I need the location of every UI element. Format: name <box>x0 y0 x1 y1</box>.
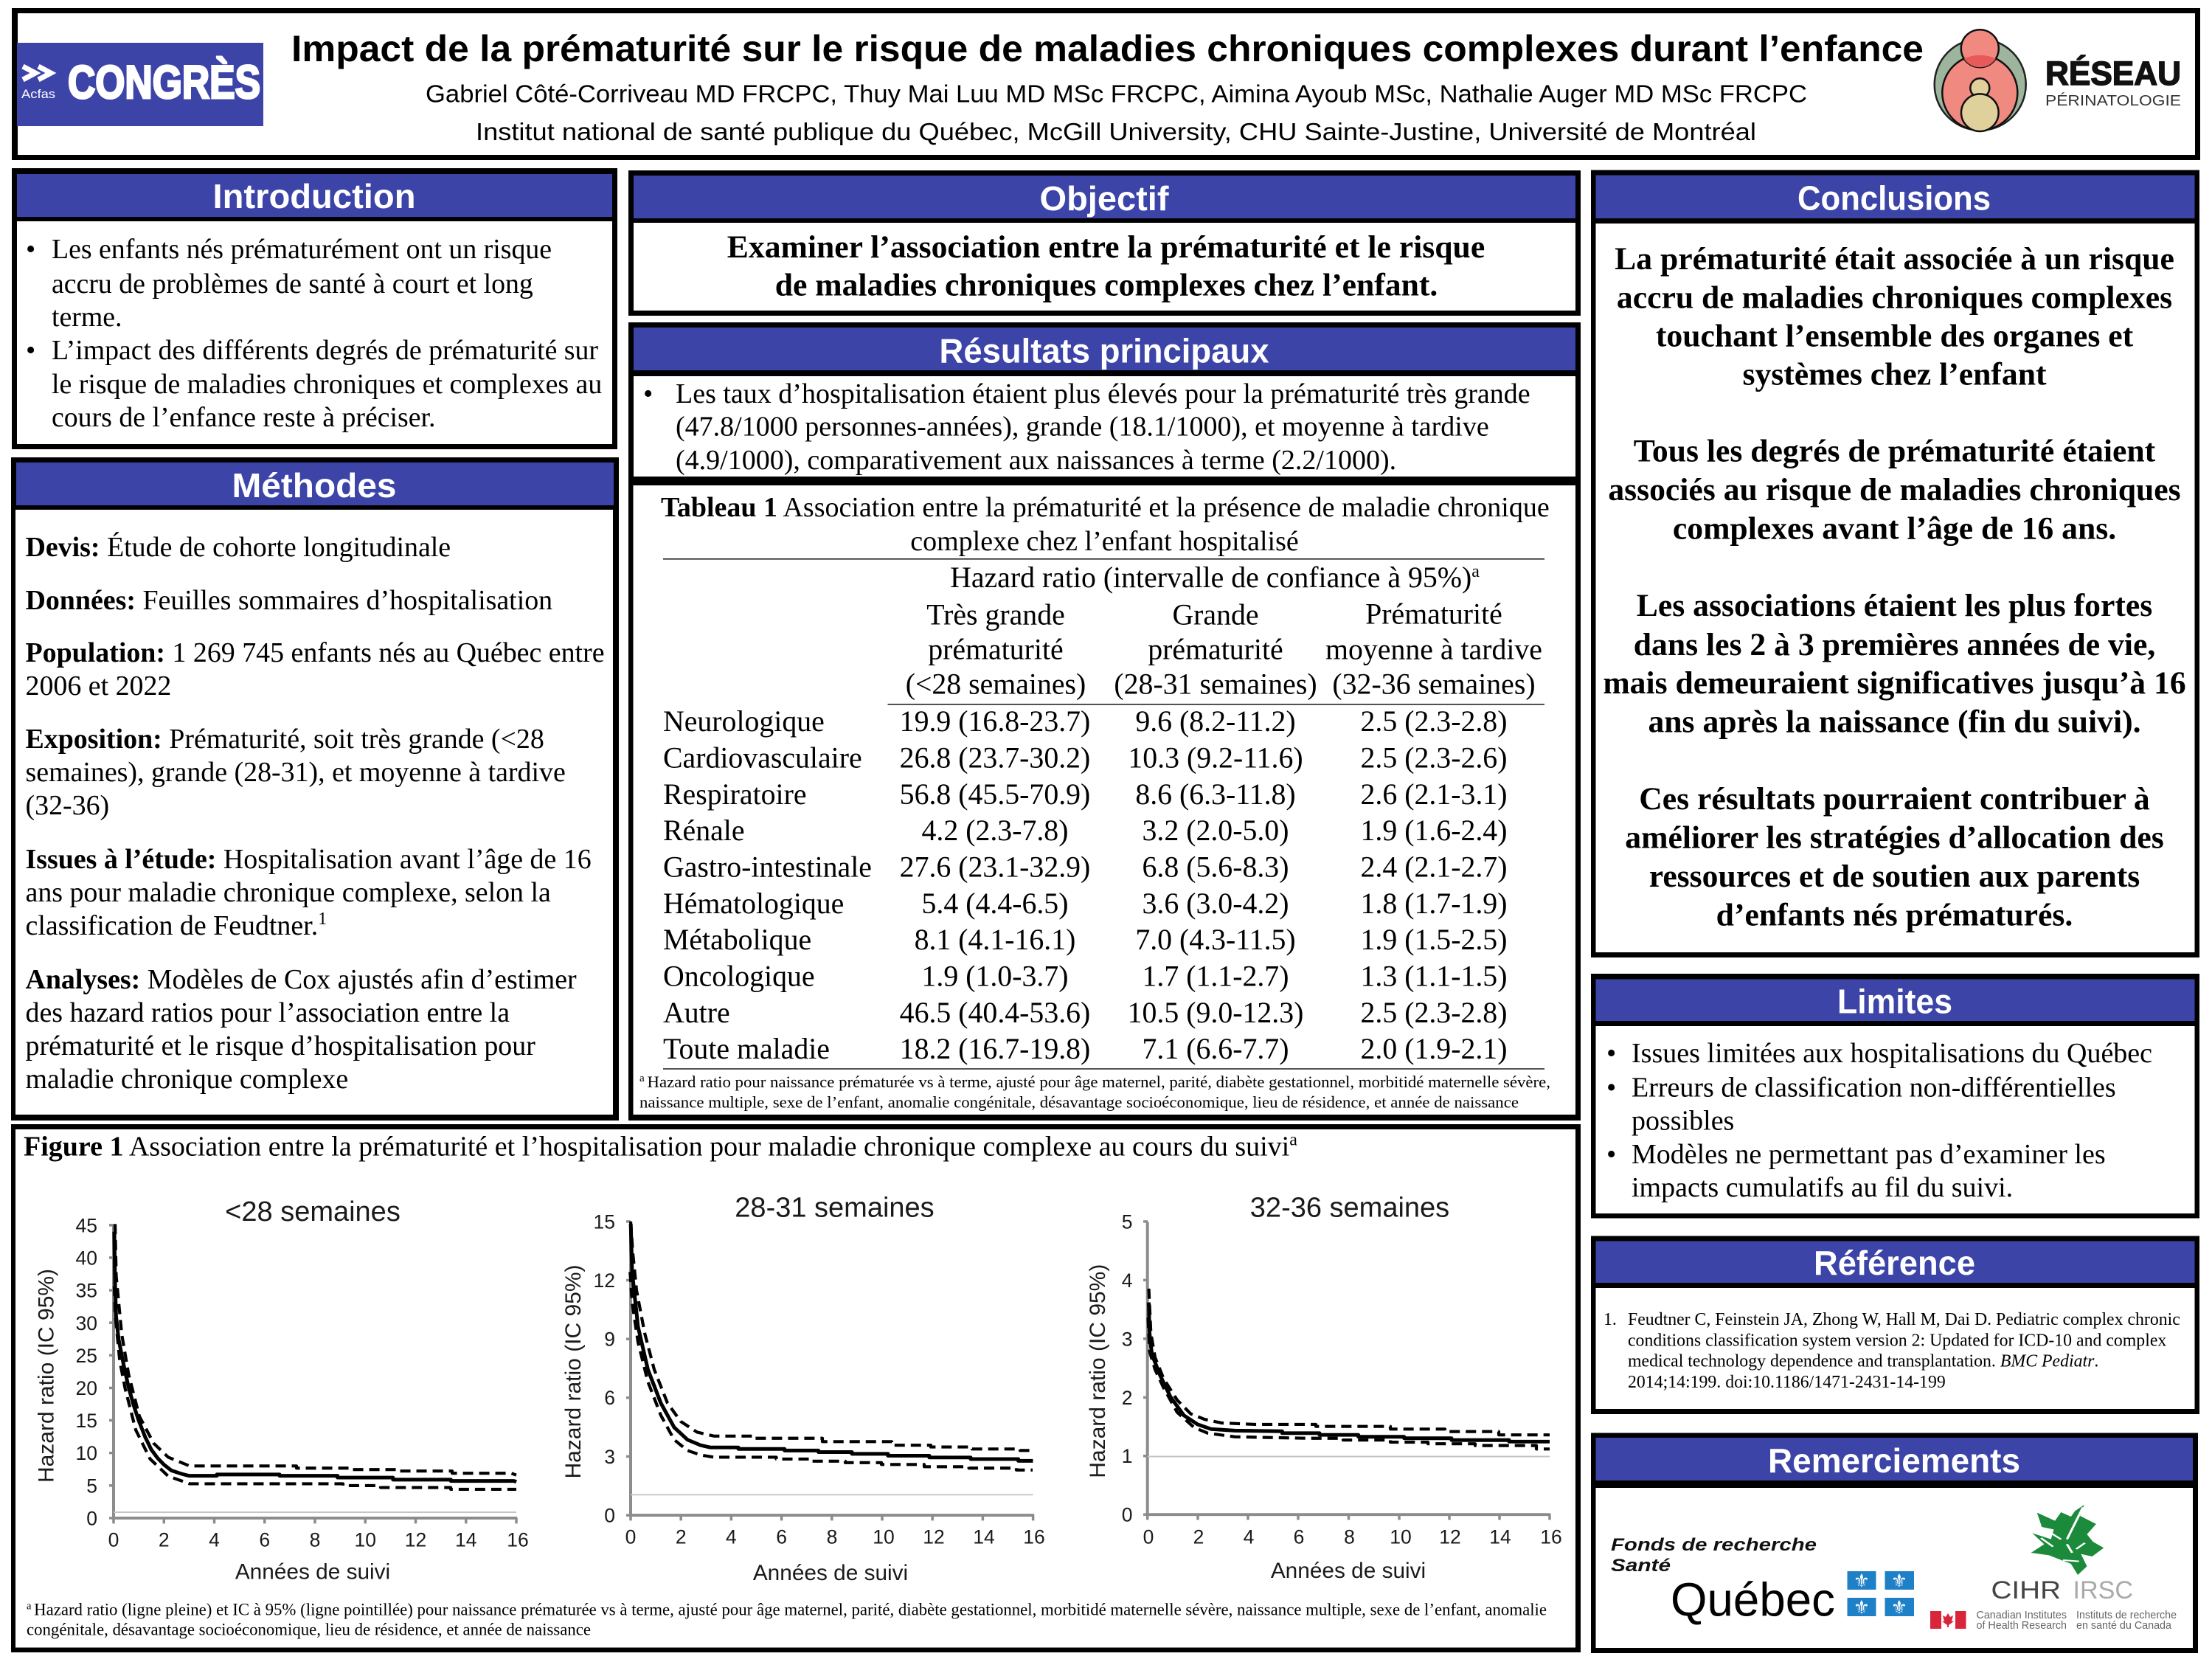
y tick labels: 15 <box>76 1410 97 1432</box>
table column headers: moyenne à tardive <box>1325 633 1542 665</box>
panel: figure 1 <box>11 1124 1581 1652</box>
table values: très grande: 27.6 (23.1-32.9) <box>900 851 1090 884</box>
y tick labels: 2 <box>1122 1387 1133 1409</box>
limites bullets <box>1606 1038 2152 1203</box>
conclusions text: améliorer les stratégies d’allocation des <box>1625 820 2164 856</box>
logo: CIHR IRSC <box>1930 1505 2177 1632</box>
table values: grande: 8.6 (6.3-11.8) <box>1135 778 1296 811</box>
logo: CIHR IRSC: IRSC <box>2073 1576 2133 1604</box>
poster title: Impact de la prématurité sur le risque de maladies chroniques complexes durant l’enfance <box>291 28 1924 69</box>
logo: Fonds de recherche Santé Québec: Québec <box>1671 1573 1835 1626</box>
x tick labels: 4 <box>726 1525 737 1548</box>
x tick labels: 10 <box>1390 1525 1412 1548</box>
panel: objectif <box>628 170 1581 316</box>
table rows: Respiratoire <box>663 778 807 811</box>
table values: grande <box>1128 705 1303 1065</box>
curve: lower CI <box>114 1286 516 1489</box>
chart title: 28-31 semaines <box>735 1193 935 1224</box>
y tick labels: 12 <box>594 1270 615 1292</box>
logo: Réseau périnatologie: RÉSEAU <box>2045 55 2181 92</box>
résultats bullet: • <box>643 378 653 409</box>
méthodes text: Population: 1 269 745 enfants nés au Québec entre <box>25 637 605 668</box>
table column headers: prématurité <box>928 633 1064 665</box>
table footnote: Hazard ratio pour naissance prématurée vs à terme, ajusté pour âge maternel, parité, diabète gestationnel, morbitidé maternelle sévère, <box>648 1073 1550 1091</box>
panel: introduction <box>12 168 617 449</box>
méthodes text: 1 <box>318 910 327 929</box>
heading: conclusions: Conclusions <box>1797 179 1991 217</box>
méthodes text: Devis: Étude de cohorte longitudinale <box>25 532 451 563</box>
reference citation: medical technology dependence and transplantation. BMC Pediatr. <box>1628 1351 2098 1371</box>
table rows <box>663 705 872 1065</box>
y tick labels <box>1122 1211 1133 1526</box>
x axis title: Années de suivi <box>753 1561 908 1585</box>
chart: 28-31 semaines <box>561 1193 1045 1585</box>
limites bullets: • <box>1606 1139 1616 1170</box>
x tick labels: 8 <box>310 1528 320 1551</box>
limites bullets: Issues limitées aux hospitalisations du Québec <box>1632 1038 2152 1069</box>
résultats bullet: (47.8/1000 personnes-années), grande (18.1/1000), et moyenne à tardive <box>676 412 1489 443</box>
intro bullets: • <box>26 234 35 265</box>
intro bullets: Les enfants nés prématurément ont un risque <box>52 234 552 265</box>
table values: très grande: 4.2 (2.3-7.8) <box>922 814 1068 847</box>
limites bullets: Modèles ne permettant pas d’examiner les <box>1632 1139 2106 1170</box>
méthodes text: Exposition: Prématurité, soit très grande (<28 <box>25 724 544 755</box>
y tick labels: 30 <box>76 1312 97 1334</box>
y tick labels: 5 <box>1122 1211 1133 1233</box>
chart: 32-36 semaines <box>1086 1193 1562 1583</box>
x tick labels: 4 <box>209 1528 220 1551</box>
table values: très grande: 1.9 (1.0-3.7) <box>922 960 1068 993</box>
y tick labels: 3 <box>1122 1328 1133 1350</box>
logo: Réseau périnatologie: PÉRINATOLOGIE <box>2045 92 2181 109</box>
table values: très grande: 8.1 (4.1-16.1) <box>915 924 1075 956</box>
table values: moyenne à tardive: 1.9 (1.5-2.5) <box>1361 924 1507 956</box>
table rows: Métabolique <box>663 924 811 956</box>
x tick labels: 0 <box>108 1528 119 1551</box>
table rows: Toute maladie <box>663 1033 830 1065</box>
limites bullets: • <box>1606 1073 1616 1104</box>
plot: axes and curves <box>1143 1222 1550 1520</box>
conclusions text: La prématurité était associée à un risque <box>1615 241 2174 277</box>
conclusions text: associés au risque de maladies chroniques <box>1608 472 2181 508</box>
logo: CIHR IRSC: en santé du Canada <box>2076 1619 2172 1632</box>
logo: Acfas Congrès <box>17 43 263 126</box>
title banner <box>12 8 2200 160</box>
conclusions text: ans après la naissance (fin du suivi). <box>1648 704 2141 739</box>
logo: Acfas Congrès: CONGRÈS <box>68 57 260 108</box>
logo: CIHR IRSC: Canadian Institutes <box>1977 1609 2067 1621</box>
x tick labels: 12 <box>405 1528 426 1551</box>
y tick labels: 25 <box>76 1345 97 1367</box>
intro bullets: accru de problèmes de santé à court et long <box>52 269 533 299</box>
objective statement <box>727 229 1485 302</box>
méthodes text: semaines), grande (28-31), et moyenne à tardive <box>25 757 566 788</box>
limites bullets: • <box>1606 1038 1616 1069</box>
x tick labels: 12 <box>1439 1525 1461 1548</box>
table values: très grande: 26.8 (23.7-30.2) <box>900 742 1090 775</box>
résultats bullet: Les taux d’hospitalisation étaient plus élevés pour la prématurité très grande <box>676 378 1530 409</box>
figure footnote: a <box>27 1601 34 1613</box>
table rows: Cardiovasculaire <box>663 742 862 775</box>
figure footnote: Hazard ratio (ligne pleine) et IC à 95% (ligne pointillée) pour naissance prématurée vs à terme, ajusté pour âge maternel, parité, diabète gestationnel, morbitidé maternelle sévère, naissance multiple, sexe de l’enfant, anomalie <box>34 1601 1547 1620</box>
x tick labels: 12 <box>923 1525 945 1548</box>
table column headers: (32-36 semaines) <box>1332 668 1536 701</box>
panel: tableau 1 <box>628 479 1581 1121</box>
x tick labels: 0 <box>1143 1525 1154 1548</box>
conclusions text: Ces résultats pourraient contribuer à <box>1639 781 2150 817</box>
logo: Fonds de recherche Santé Québec: ⚜ <box>1854 1570 1870 1592</box>
table title <box>661 492 1550 557</box>
panel: méthodes <box>11 457 619 1121</box>
conclusions text: Les associations étaient les plus fortes <box>1637 588 2152 623</box>
chart title: <28 semaines <box>225 1196 401 1227</box>
table title: complexe chez l’enfant hospitalisé <box>910 526 1299 557</box>
table values: grande: 9.6 (8.2-11.2) <box>1135 705 1296 738</box>
table values: moyenne à tardive: 1.8 (1.7-1.9) <box>1361 887 1507 920</box>
authors: Gabriel Côté-Corriveau MD FRCPC, Thuy Mai Luu MD MSc FRCPC, Aimina Ayoub MSc, Nathalie Auger MD MSc FRCPC <box>426 80 1807 108</box>
curve: upper CI <box>1149 1289 1550 1435</box>
logo: Fonds de recherche Santé Québec: Fonds de recherche <box>1611 1535 1817 1555</box>
reference citation: conditions classification system version 2: Updated for ICD-10 and complex <box>1628 1331 2166 1350</box>
panel: limites <box>1591 974 2199 1219</box>
icon: CIHR maple leaf <box>2031 1505 2104 1575</box>
conclusions text: Tous les degrés de prématurité étaient <box>1634 434 2156 469</box>
x axis title: Années de suivi <box>1271 1559 1426 1583</box>
intro bullets: cours de l’enfance reste à préciser. <box>52 402 435 433</box>
x tick labels: 10 <box>355 1528 376 1551</box>
x tick labels: 2 <box>1193 1525 1204 1548</box>
x tick labels: 6 <box>776 1525 787 1548</box>
x tick labels: 6 <box>259 1528 270 1551</box>
affiliations: Institut national de santé publique du Québec, McGill University, CHU Sainte-Justine, Université de Montréal <box>476 118 1756 145</box>
y tick labels <box>594 1211 615 1527</box>
y tick labels: 45 <box>76 1214 97 1236</box>
y axis title: Hazard ratio (IC 95%) <box>34 1269 59 1483</box>
y axis title: Hazard ratio (IC 95%) <box>561 1264 586 1479</box>
reference citation <box>1603 1310 2180 1392</box>
intro bullets: • <box>26 335 35 366</box>
x tick labels: 10 <box>873 1525 895 1548</box>
plot: axes and curves <box>109 1224 517 1523</box>
table values: moyenne à tardive: 1.9 (1.6-2.4) <box>1361 814 1507 847</box>
conclusions text: systèmes chez l’enfant <box>1742 357 2047 392</box>
table rows: Gastro-intestinale <box>663 851 872 884</box>
table values: grande: 7.0 (4.3-11.5) <box>1135 924 1296 956</box>
logo: Acfas Congrès: Acfas <box>21 87 55 101</box>
panel: remerciements <box>1591 1433 2198 1653</box>
table column headers: (<28 semaines) <box>906 668 1086 701</box>
table column headers: Hazard ratio (intervalle de confiance à 95%) <box>950 561 1471 594</box>
intro bullets <box>26 234 602 433</box>
y tick labels: 0 <box>86 1507 97 1529</box>
panel: référence <box>1591 1236 2199 1414</box>
table column headers: Grande <box>1172 599 1259 631</box>
méthodes text: (32-36) <box>25 790 109 821</box>
x tick labels: 14 <box>973 1525 995 1548</box>
table values: très grande: 56.8 (45.5-70.9) <box>900 778 1090 811</box>
conclusions text: complexes avant l’âge de 16 ans. <box>1673 510 2116 546</box>
x tick labels: 0 <box>625 1525 636 1548</box>
intro bullets: L’impact des différents degrés de prématurité sur <box>52 335 598 366</box>
conclusions text <box>1603 241 2186 932</box>
y tick labels: 35 <box>76 1280 97 1302</box>
curve: lower CI <box>1148 1317 1550 1449</box>
logo: Fonds de recherche Santé Québec: ⚜ <box>1891 1570 1907 1592</box>
reference citation: 1. <box>1603 1310 1617 1329</box>
méthodes text: classification de Feudtner. <box>25 910 318 941</box>
heading: référence: Référence <box>1814 1244 1975 1282</box>
table values: moyenne à tardive: 2.4 (2.1-2.7) <box>1361 851 1507 884</box>
table values: très grande: 18.2 (16.7-19.8) <box>900 1033 1090 1065</box>
chart: <28 semaines <box>34 1196 529 1584</box>
table column headers: (28-31 semaines) <box>1114 668 1317 701</box>
curve: hazard ratio <box>114 1232 516 1482</box>
table rows: Neurologique <box>663 705 825 738</box>
reference citation: Feudtner C, Feinstein JA, Zhong W, Hall M, Dai D. Pediatric complex chronic <box>1628 1310 2180 1329</box>
table rows: Oncologique <box>663 960 815 993</box>
y axis title: Hazard ratio (IC 95%) <box>1086 1264 1110 1478</box>
conclusions text: d’enfants nés prématurés. <box>1716 897 2073 932</box>
curve: hazard ratio <box>631 1224 1033 1461</box>
curve: hazard ratio <box>1149 1303 1550 1441</box>
heading: remerciements: Remerciements <box>1768 1441 2020 1480</box>
x tick labels: 2 <box>159 1528 170 1551</box>
table column headers <box>906 561 1542 701</box>
table rows: Rénale <box>663 814 745 847</box>
x tick labels: 14 <box>1489 1525 1511 1548</box>
table values: moyenne à tardive: 2.6 (2.1-3.1) <box>1361 778 1507 811</box>
table values: grande: 3.2 (2.0-5.0) <box>1143 814 1289 847</box>
table column headers: Très grande <box>926 599 1065 631</box>
figure footnote <box>27 1601 1547 1639</box>
table footnote: a <box>639 1073 648 1084</box>
table values: très grande: 19.9 (16.8-23.7) <box>900 705 1090 738</box>
x tick labels <box>625 1525 1045 1548</box>
y tick labels: 1 <box>1122 1445 1133 1467</box>
conclusions text: touchant l’ensemble des organes et <box>1656 319 2134 354</box>
conclusions text: dans les 2 à 3 premières années de vie, <box>1634 627 2155 662</box>
heading: résultats principaux: Résultats principaux <box>940 332 1269 370</box>
y tick labels <box>76 1214 97 1529</box>
table values: moyenne à tardive: 2.5 (2.3-2.8) <box>1361 997 1507 1029</box>
table values: grande: 10.3 (9.2-11.6) <box>1128 742 1303 775</box>
table rows: Autre <box>663 997 730 1029</box>
table column headers: prématurité <box>1148 633 1283 665</box>
plot: axes and curves <box>626 1222 1034 1520</box>
table title: Tableau 1 Association entre la prématurité et la présence de maladie chronique <box>661 492 1550 523</box>
icon: Canadian flag <box>1930 1611 1966 1629</box>
x tick labels: 6 <box>1294 1525 1304 1548</box>
heading: méthodes: Méthodes <box>232 466 397 505</box>
table values: très grande: 5.4 (4.4-6.5) <box>922 887 1068 920</box>
y tick labels: 6 <box>604 1387 615 1409</box>
curve: upper CI <box>631 1222 1033 1450</box>
y tick labels: 40 <box>76 1247 97 1270</box>
conclusions text: mais demeuraient significatives jusqu’à 16 <box>1603 665 2186 701</box>
figure caption: a <box>1289 1130 1297 1149</box>
méthodes text: prématurité et le risque d’hospitalisation pour <box>25 1031 535 1061</box>
figure caption: Figure 1 Association entre la prématurité et l’hospitalisation pour maladie chronique complexe au cours du suivi <box>24 1132 1289 1163</box>
chart title: 32-36 semaines <box>1250 1193 1449 1224</box>
logo: Réseau périnatologie <box>1935 30 2181 131</box>
objective statement: Examiner l’association entre la prématurité et le risque <box>727 229 1485 265</box>
logo: Fonds de recherche Santé Québec: ⚜ <box>1854 1596 1870 1618</box>
table values: moyenne à tardive <box>1361 705 1507 1065</box>
y tick labels: 9 <box>604 1329 615 1351</box>
x tick labels: 2 <box>676 1525 687 1548</box>
intro bullets: terme. <box>52 302 122 333</box>
table rows: Hématologique <box>663 887 844 920</box>
méthodes text: Analyses: Modèles de Cox ajustés afin d’estimer <box>25 964 577 995</box>
x tick labels: 8 <box>1344 1525 1355 1548</box>
table values: grande: 7.1 (6.6-7.7) <box>1143 1033 1289 1065</box>
curve: upper CI <box>115 1224 516 1475</box>
x tick labels: 8 <box>827 1525 837 1548</box>
y tick labels: 0 <box>1122 1504 1133 1526</box>
méthodes text <box>25 532 605 1095</box>
table values: moyenne à tardive: 2.0 (1.9-2.1) <box>1361 1033 1507 1065</box>
y tick labels: 0 <box>604 1505 615 1527</box>
logo: CIHR IRSC: Instituts de recherche <box>2076 1609 2177 1621</box>
résultats bullet <box>643 378 1530 476</box>
conclusions text: ressources et de soutien aux parents <box>1649 859 2140 894</box>
table values: grande: 6.8 (5.6-8.3) <box>1143 851 1289 884</box>
logo: CIHR IRSC: of Health Research <box>1977 1619 2067 1632</box>
limites bullets: impacts cumulatifs au fil du suivi. <box>1632 1172 2013 1203</box>
table column headers: Prématurité <box>1365 598 1502 630</box>
table footnote <box>639 1073 1550 1111</box>
x tick labels: 4 <box>1244 1525 1254 1548</box>
reference citation: 2014;14:199. doi:10.1186/1471-2431-14-199 <box>1628 1373 1946 1392</box>
x axis title: Années de suivi <box>235 1559 390 1584</box>
méthodes text: Données: Feuilles sommaires d’hospitalisation <box>25 585 552 616</box>
table values: grande: 10.5 (9.0-12.3) <box>1128 997 1303 1029</box>
table values: très grande <box>900 705 1090 1065</box>
x tick labels: 14 <box>455 1528 476 1551</box>
heading: introduction: Introduction <box>212 177 416 215</box>
panel: conclusions <box>1591 170 2199 957</box>
figure footnote: congénitale, désavantage socioéconomique, lieu de résidence, et année de naissance <box>27 1620 591 1639</box>
méthodes text: maladie chronique complexe <box>25 1064 348 1095</box>
table values: très grande: 46.5 (40.4-53.6) <box>900 997 1090 1029</box>
logo: CIHR IRSC: CIHR <box>1991 1576 2061 1604</box>
méthodes text: 2006 et 2022 <box>25 671 171 702</box>
table values: moyenne à tardive: 2.5 (2.3-2.8) <box>1361 705 1507 738</box>
objective statement: de maladies chroniques complexes chez l’enfant. <box>775 267 1438 302</box>
méthodes text: des hazard ratios pour l’association entre la <box>25 997 510 1028</box>
panel: résultats principaux <box>628 322 1581 485</box>
x tick labels: 16 <box>1023 1525 1045 1548</box>
curve: lower CI <box>630 1272 1033 1470</box>
méthodes text: ans pour maladie chronique complexe, selon la <box>25 877 551 908</box>
y tick labels: 3 <box>604 1446 615 1468</box>
conclusions text: accru de maladies chroniques complexes <box>1617 280 2172 316</box>
logo: Fonds de recherche Santé Québec: Santé <box>1611 1556 1671 1576</box>
x tick labels: 16 <box>507 1528 529 1551</box>
table values: moyenne à tardive: 2.5 (2.3-2.6) <box>1361 742 1507 775</box>
y tick labels: 15 <box>594 1211 615 1233</box>
limites bullets: Erreurs de classification non-différentielles <box>1632 1073 2116 1104</box>
table column headers: a <box>1471 562 1480 581</box>
x tick labels: 16 <box>1540 1525 1562 1548</box>
x tick labels <box>1143 1525 1562 1548</box>
table values: grande: 1.7 (1.1-2.7) <box>1143 960 1289 993</box>
heading: limites: Limites <box>1837 983 1952 1021</box>
table values: moyenne à tardive: 1.3 (1.1-1.5) <box>1361 960 1507 993</box>
y tick labels: 4 <box>1122 1270 1133 1292</box>
table footnote: naissance multiple, sexe de l’enfant, anomalie congénitale, désavantage socioéconomique, lieu de résidence, et année de naissance <box>639 1093 1519 1111</box>
logo: Fonds de recherche Santé Québec <box>1611 1535 1914 1626</box>
y tick labels: 20 <box>76 1377 97 1399</box>
heading: objectif: Objectif <box>1040 179 1169 218</box>
intro bullets: le risque de maladies chroniques et complexes au <box>52 369 602 400</box>
table values: grande: 3.6 (3.0-4.2) <box>1143 887 1289 920</box>
résultats bullet: (4.9/1000), comparativement aux naissances à terme (2.2/1000). <box>676 445 1396 476</box>
limites bullets: possibles <box>1632 1105 1734 1136</box>
x tick labels <box>108 1528 529 1551</box>
méthodes text: Issues à l’étude: Hospitalisation avant l’âge de 16 <box>25 844 592 875</box>
y tick labels: 10 <box>76 1442 97 1464</box>
logo: Fonds de recherche Santé Québec: ⚜ <box>1891 1596 1907 1618</box>
y tick labels: 5 <box>86 1475 97 1497</box>
